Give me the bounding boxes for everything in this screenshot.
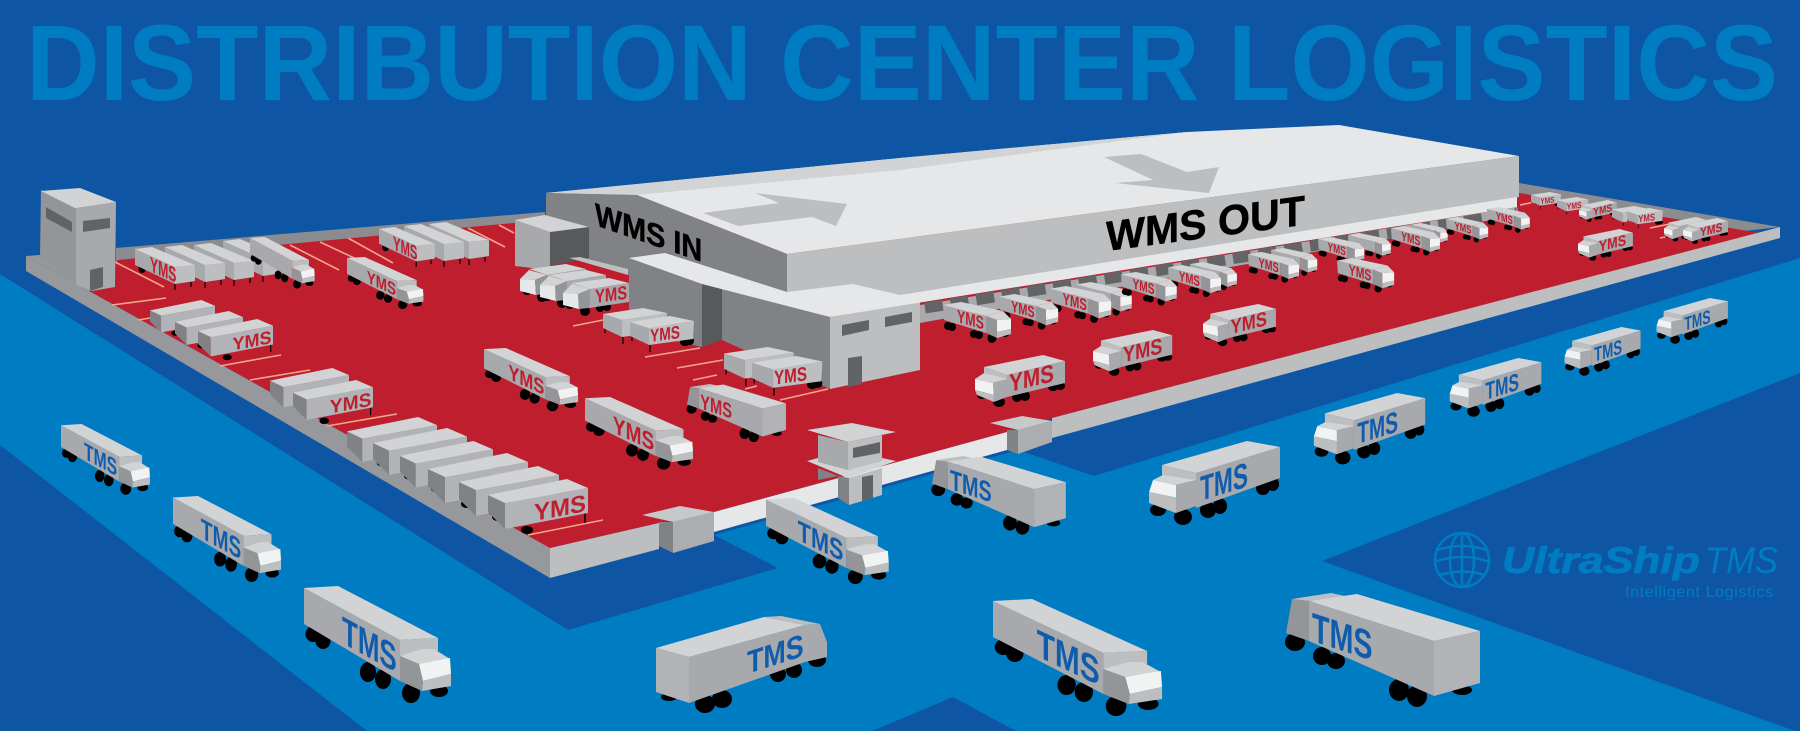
YMS trucks in yard right: YMS [1123, 334, 1162, 368]
YMS trucks at dock doors: YMS [1328, 240, 1346, 259]
inbound truck group at annex [520, 264, 629, 316]
front office block [629, 197, 1517, 389]
YMS trucks in yard centre [484, 348, 786, 470]
TMS truck rear view, bottom right: TMS [1312, 603, 1373, 670]
arrow: inbound [703, 193, 847, 226]
YMS trailers and trucks at far right of yard: YMS [1700, 220, 1723, 240]
TMS trucks on exit road [1149, 298, 1728, 525]
ground: light blue roads [0, 258, 1800, 731]
wordmark: UltraShip [1502, 540, 1700, 581]
parked trailers: back row: YMS [150, 252, 177, 288]
TMS truck left 1 [61, 424, 150, 495]
YMS trailers and trucks at far right of yard: YMS [1638, 211, 1655, 225]
annex [515, 215, 628, 275]
label: WMS IN: WMS IN [595, 196, 702, 269]
main roof [546, 125, 1519, 254]
TMS truck rear view, bottom left [656, 616, 827, 713]
TMS truck left 2: TMS [201, 513, 241, 566]
parked trailers: beside annex: YMS [650, 322, 680, 346]
TMS trucks on exit road: TMS [1684, 306, 1711, 335]
YMS trucks at dock doors: YMS [1179, 268, 1200, 290]
TMS truck left 2 [173, 496, 281, 582]
YMS trailers and trucks at far right of yard: YMS [1567, 200, 1581, 212]
roof edge shading [546, 132, 1187, 195]
TMS truck bottom centre: TMS [1037, 620, 1100, 694]
TMS truck at gate [766, 498, 889, 584]
ground: bottom centre dark area [872, 697, 1016, 731]
YMS truck: YMS [367, 267, 396, 300]
TMS trucks on exit road: TMS [1485, 369, 1519, 406]
TMS truck rear view, centre: TMS [950, 465, 992, 509]
YMS trucks at dock doors: YMS [1455, 220, 1472, 238]
YMS trucks in yard centre: YMS [700, 389, 732, 423]
YMS truck [347, 257, 423, 309]
YMS trucks in yard centre: YMS [508, 361, 544, 401]
YMS trucks in yard right: YMS [1231, 307, 1267, 338]
parked trailers: back row [135, 237, 315, 290]
YMS trailers and trucks at far right of yard: YMS [1540, 195, 1554, 206]
logo [1434, 533, 1778, 601]
gate block left [642, 506, 714, 553]
YMS trucks at dock doors: YMS [1401, 230, 1421, 249]
warehouse building [515, 125, 1519, 323]
YMS trailers and trucks at far right of yard [1531, 192, 1728, 261]
parked trailers: left pair [270, 368, 373, 424]
arrow: outbound [1104, 154, 1219, 193]
parking lines [112, 198, 1700, 535]
YMS trucks in yard centre: YMS [613, 411, 654, 457]
tagline: Intelligent Logistics [1625, 584, 1773, 601]
parked trailers: back centre [379, 222, 489, 267]
parked trailers: beside annex [603, 308, 694, 352]
front wall [787, 156, 1519, 300]
parked trailers: back centre: YMS [393, 233, 418, 265]
TMS trucks on exit road: TMS [1200, 456, 1248, 509]
YMS trucks at dock doors: YMS [1063, 289, 1087, 314]
parked trailers: left row [150, 300, 273, 360]
wordmark: TMS: TMS [1705, 540, 1778, 581]
TMS truck left 3: TMS [342, 609, 397, 682]
YMS trucks at dock doors: YMS [1011, 298, 1035, 321]
YMS trucks in yard right: YMS [1009, 359, 1054, 397]
gatehouse [807, 423, 896, 505]
TMS truck left 1: TMS [84, 438, 117, 482]
YMS trucks at dock doors [943, 207, 1530, 343]
YMS trucks at dock doors: YMS [957, 307, 984, 334]
inbound truck group at annex: YMS [595, 282, 627, 307]
yard platform [26, 183, 1780, 578]
gate block right [990, 416, 1052, 454]
parked trailers: left row: YMS [232, 327, 272, 354]
parked trailers: beside office [724, 347, 822, 396]
TMS truck rear view, centre [931, 456, 1066, 535]
YMS trucks at dock doors: YMS [1496, 210, 1513, 228]
YMS trucks at dock doors: YMS [1349, 261, 1372, 285]
icon: globe [1434, 533, 1490, 587]
YMS trucks in yard right [975, 304, 1276, 407]
TMS trucks on exit road: TMS [1357, 406, 1398, 451]
parked trailers: long front row [347, 417, 588, 534]
YMS trucks at dock doors: YMS [1258, 255, 1279, 276]
parked trailers: long front row: YMS [534, 490, 586, 527]
TMS truck left 3 [304, 586, 451, 703]
ground: right dark area [1322, 373, 1800, 731]
TMS trucks on exit road: TMS [1594, 335, 1622, 366]
YMS trailers and trucks at far right of yard: YMS [1599, 232, 1626, 256]
parked trailers: beside office: YMS [774, 362, 807, 389]
TMS truck at gate: TMS [798, 514, 843, 568]
control tower [26, 188, 116, 291]
YMS trucks at dock doors: YMS [1132, 275, 1155, 298]
dock doors [920, 207, 1519, 323]
parked trailers: left pair: YMS [330, 389, 371, 419]
TMS truck rear view, bottom left: TMS [747, 628, 804, 681]
TMS truck rear view, bottom right [1285, 593, 1480, 707]
YMS trailers and trucks at far right of yard: YMS [1593, 202, 1613, 219]
label: WMS OUT: WMS OUT [1106, 186, 1305, 260]
side wall [546, 193, 787, 292]
TMS truck bottom centre [993, 599, 1162, 716]
ground: lower left dark area [0, 445, 367, 731]
